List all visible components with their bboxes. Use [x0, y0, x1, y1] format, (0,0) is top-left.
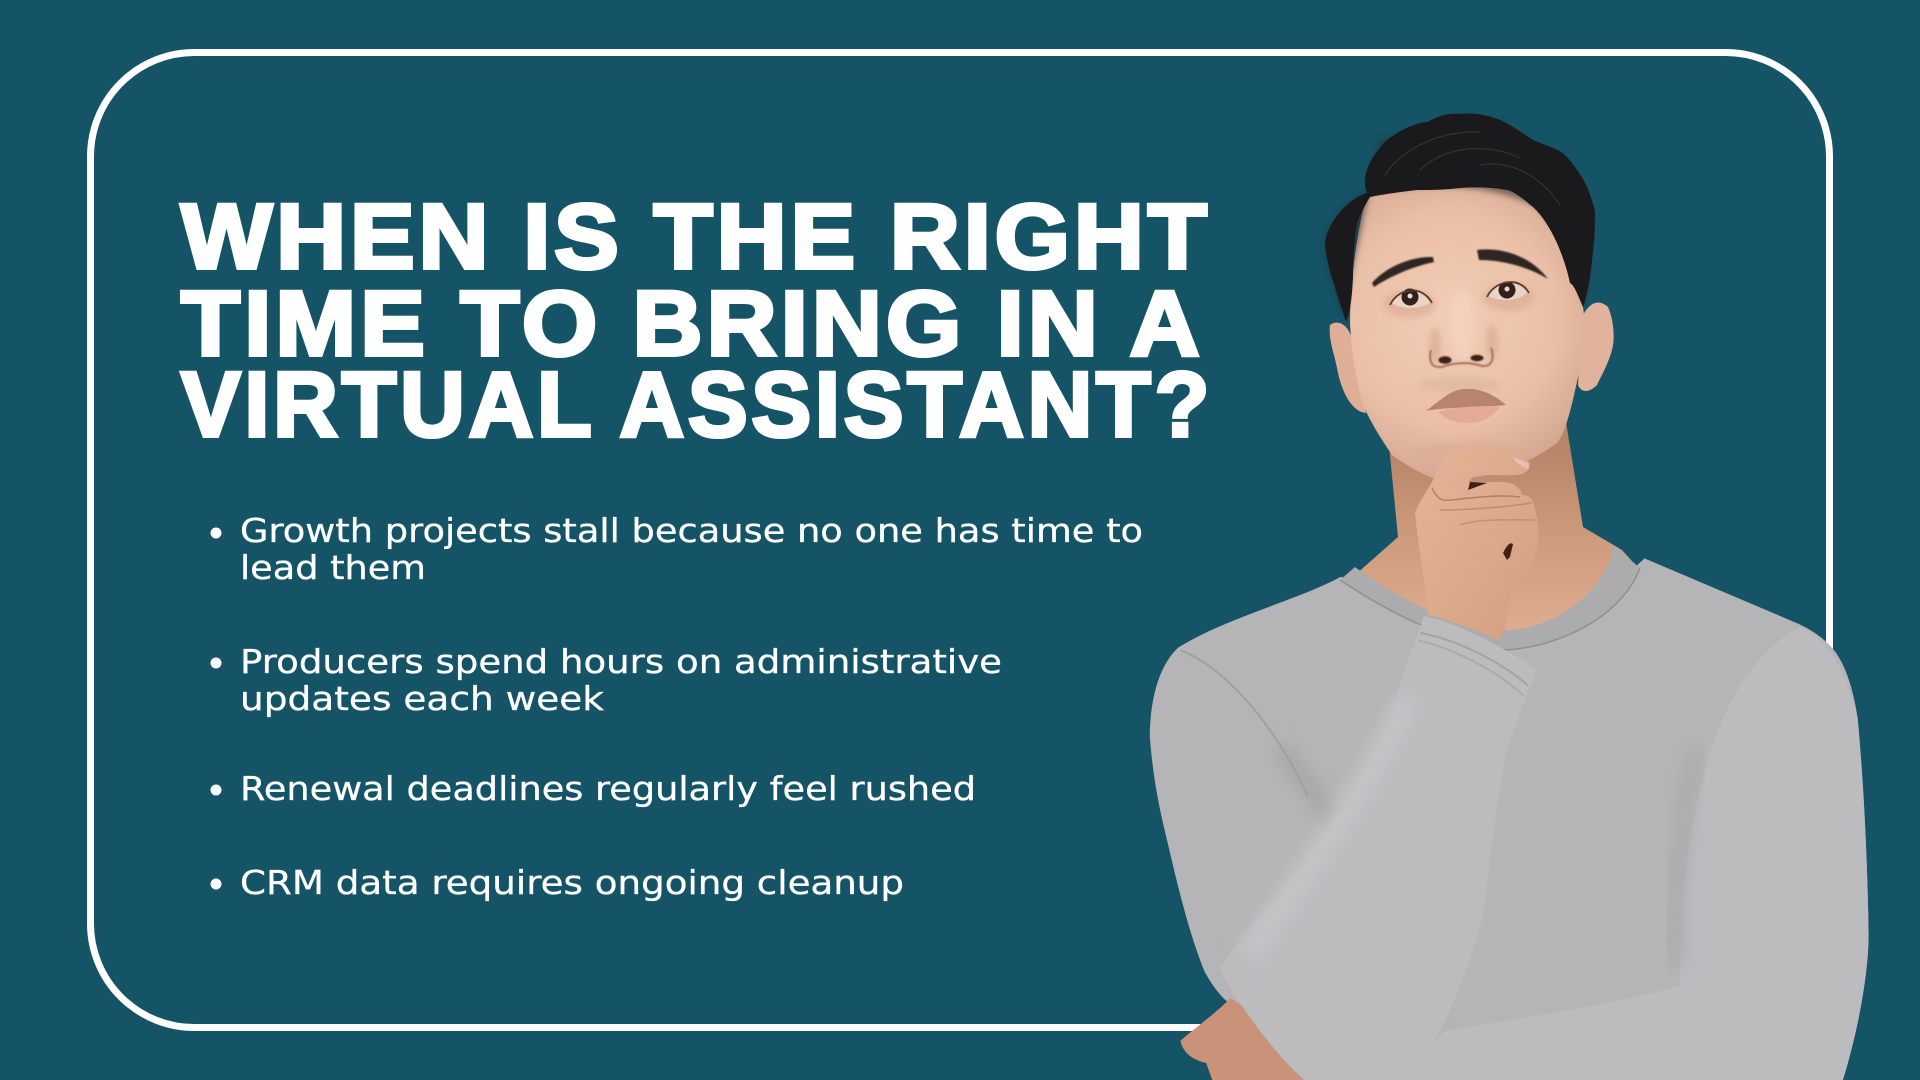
bullet 4: CRM data requires ongoing cleanup — [240, 863, 904, 902]
nostrils — [1438, 355, 1484, 364]
left eye — [1390, 288, 1432, 308]
fingernail — [1513, 457, 1529, 469]
hair fade — [1325, 120, 1590, 317]
cuff seams — [1418, 633, 1528, 696]
finger gap shadows — [1468, 482, 1513, 560]
forearm highlight — [1249, 698, 1408, 955]
eyes — [1390, 282, 1529, 308]
shirt shading — [1180, 650, 1696, 1016]
hair strands — [1385, 132, 1560, 205]
hair — [1325, 113, 1595, 322]
shirt body — [1150, 558, 1869, 1080]
neck — [1355, 422, 1640, 655]
raised forearm and cuff — [1220, 616, 1537, 1080]
right eye — [1487, 282, 1529, 300]
person thinking — [1150, 113, 1869, 1080]
hand on chin — [1415, 447, 1538, 640]
left ear — [1330, 323, 1366, 413]
bullet 2 — [210, 642, 1002, 718]
bullet 1: Growth projects stall because no one has time to — [240, 511, 1143, 550]
bullet 2: updates each week — [240, 679, 605, 718]
title — [181, 185, 1209, 456]
left hand at bottom — [1180, 998, 1310, 1080]
eyebrows — [1372, 249, 1548, 287]
right ear — [1578, 302, 1614, 391]
bullet 1: lead them — [240, 548, 426, 587]
title: VIRTUAL ASSISTANT? — [181, 354, 1209, 456]
right upper arm — [1408, 627, 1869, 1080]
collar — [1340, 545, 1640, 650]
face — [1350, 172, 1584, 480]
title: WHEN IS THE RIGHT — [181, 185, 1207, 288]
finger details — [1432, 488, 1535, 525]
bullet list — [210, 511, 1143, 902]
title: TIME TO BRING IN A — [181, 272, 1199, 375]
lips — [1426, 389, 1506, 423]
facial shading — [1384, 284, 1534, 392]
bullet 1 — [210, 511, 1143, 587]
nose base — [1430, 348, 1493, 367]
torso and sleeves — [1150, 558, 1869, 1080]
bullet 2: Producers spend hours on administrative — [240, 642, 1002, 681]
bullet 3: Renewal deadlines regularly feel rushed — [240, 769, 976, 808]
